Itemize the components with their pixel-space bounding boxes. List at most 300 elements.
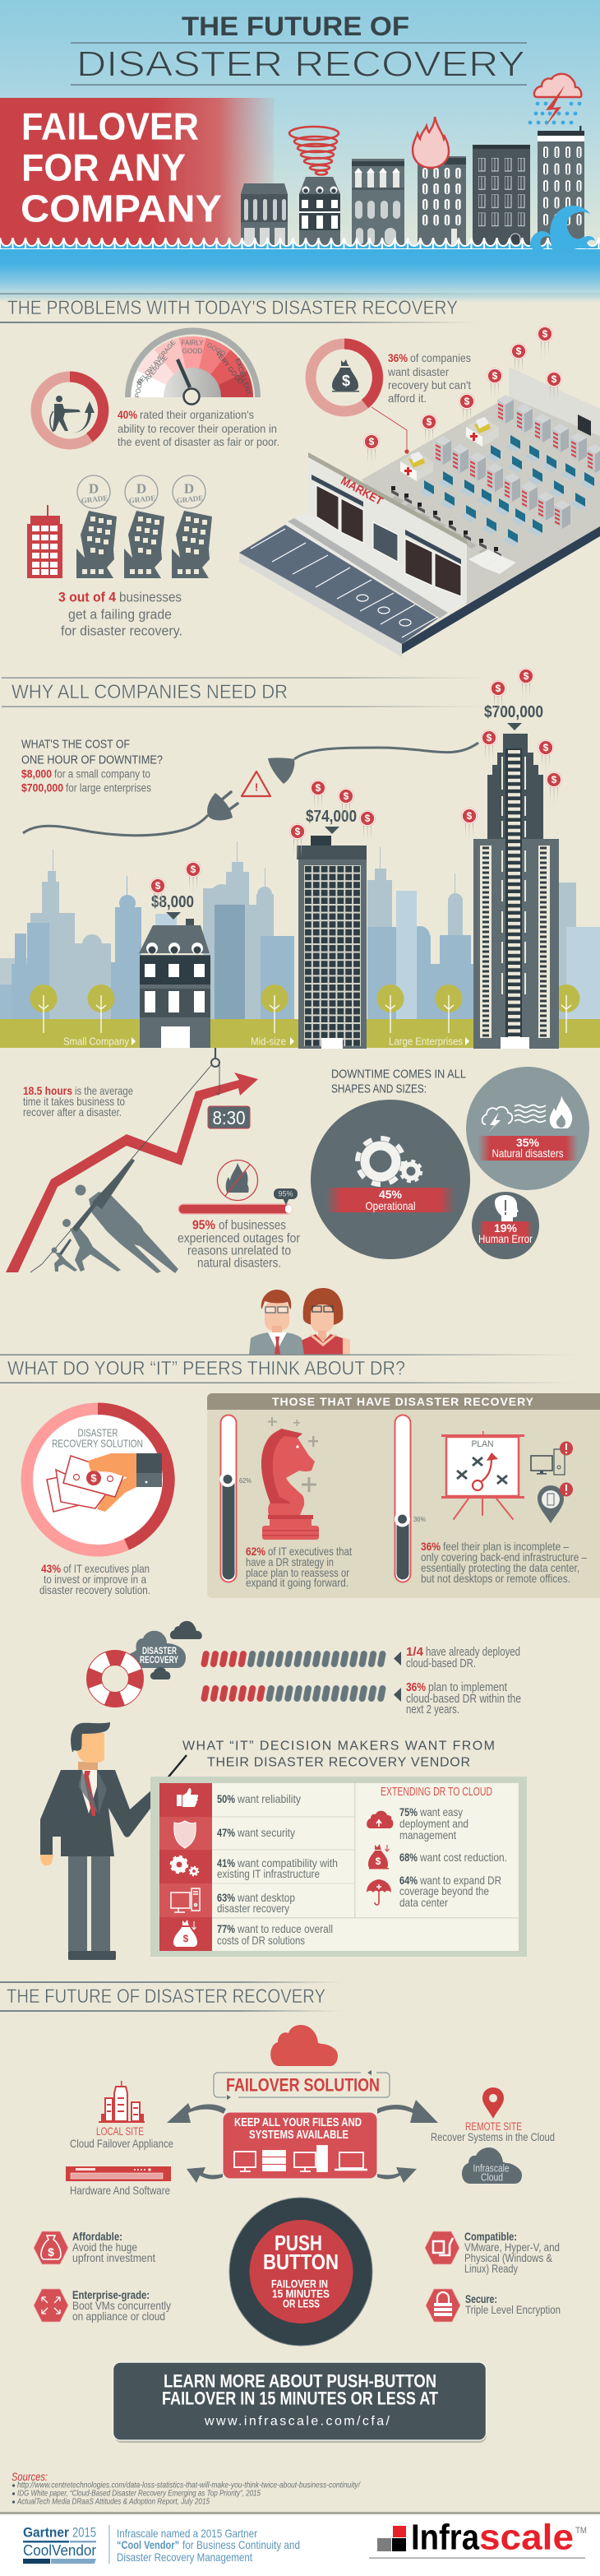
icon: cloud upload bbox=[367, 1811, 393, 1828]
list: vendor wants: 47% bbox=[217, 1826, 235, 1839]
value: $74,000: $74,000 bbox=[306, 808, 357, 826]
value: $700,000 bbox=[484, 703, 543, 730]
heading: WHAT DO YOUR “IT” PEERS THINK ABOUT DR? bbox=[7, 1357, 405, 1380]
icon: desktop alert bbox=[531, 1441, 573, 1475]
text block: 1/4: cloud-based DR. bbox=[406, 1657, 476, 1670]
text block: 40%: ability to recover their operation in bbox=[118, 422, 277, 435]
text block: 75%: deployment and bbox=[399, 1817, 468, 1830]
dollar pins: $ bbox=[365, 813, 371, 824]
icon: puzzle arrows bbox=[433, 2238, 453, 2255]
progress bar: 95% bbox=[178, 1188, 298, 1214]
text block: 3 out of 4: 3 out of 4 bbox=[58, 589, 116, 605]
icon: money bag bbox=[41, 2235, 61, 2259]
panel: keep all your files bbox=[223, 2112, 377, 2179]
icon: thumbs up bbox=[177, 1788, 198, 1807]
hook and rope bbox=[30, 1048, 219, 1272]
bubble: operational: Operational bbox=[365, 1199, 416, 1212]
icon: warning triangle: ! bbox=[255, 781, 258, 793]
bubble: human error bbox=[472, 1192, 539, 1259]
heading: downtime bbox=[331, 1068, 466, 1096]
dollar pins: $ bbox=[516, 345, 522, 357]
text block: cost of downtime: ONE HOUR OF DOWNTIME? bbox=[21, 753, 163, 767]
text block: 18.5 hours bbox=[23, 1084, 133, 1119]
building 4 bbox=[418, 156, 466, 245]
icon: money bag down: $ bbox=[376, 1856, 381, 1867]
donut chart: 43% bbox=[21, 1402, 175, 1556]
list: vendor wants: want compatibility with bbox=[237, 1856, 338, 1869]
dollar pins: $ bbox=[295, 826, 301, 837]
text block: 36%: afford it. bbox=[388, 391, 427, 405]
ground labels: Mid-size bbox=[251, 1035, 286, 1048]
icon: shield bbox=[174, 1821, 196, 1848]
dollar pins: $ bbox=[487, 732, 492, 744]
Gartner cool vendor logo: 2015 bbox=[72, 2525, 96, 2540]
text block: 40% bbox=[118, 408, 279, 448]
remote site bbox=[431, 2087, 555, 2184]
text block: cost of downtime: $700,000 bbox=[21, 781, 63, 795]
icon: hardware appliance bbox=[66, 2166, 171, 2181]
icon: warning triangle bbox=[242, 771, 270, 796]
isometric store bbox=[239, 326, 600, 657]
icon: location alert bbox=[538, 1482, 573, 1523]
text block: 62% bbox=[246, 1545, 352, 1589]
text block: 36% cloud: plan to implement bbox=[428, 1681, 507, 1694]
bubble: natural disasters: Natural disasters bbox=[492, 1147, 564, 1160]
building 5 bbox=[473, 145, 530, 245]
dollar pins: $ bbox=[191, 864, 196, 875]
icon: city bbox=[99, 2081, 145, 2123]
local site: Cloud Failover Appliance bbox=[70, 2137, 173, 2150]
red banner: FAILOVER bbox=[21, 105, 199, 148]
text block: 18.5 hours: time it takes business to bbox=[23, 1095, 125, 1108]
icon: unplugged cable bbox=[23, 743, 478, 836]
callout: 95% bbox=[274, 1188, 298, 1205]
text block: 3 out of 4: for disaster recovery. bbox=[61, 623, 182, 638]
text block: 36% cloud: 36% bbox=[406, 1681, 426, 1694]
water bbox=[0, 238, 600, 303]
disaster recovery cloud: RECOVERY bbox=[140, 1654, 178, 1666]
text block: Gartner note: Disaster Recovery Management bbox=[117, 2551, 252, 2564]
list: vendor wants: want desktop bbox=[237, 1891, 295, 1904]
text block: 95%: reasons unrelated to bbox=[187, 1244, 291, 1258]
mid-size building bbox=[297, 808, 367, 1049]
panel: vendor wants bbox=[150, 1777, 527, 1957]
pill chart: 1/4 bbox=[201, 1651, 401, 1667]
callout line bbox=[372, 407, 409, 454]
dollar pins bbox=[363, 326, 562, 472]
text block: cost of downtime: WHAT'S THE COST OF bbox=[21, 737, 130, 752]
text block: cost of downtime: for a small company to bbox=[54, 768, 150, 780]
callout: 95%: 95% bbox=[278, 1189, 293, 1198]
pill chart: 36% bbox=[201, 1685, 401, 1702]
failing grade buildings bbox=[27, 475, 212, 578]
list: vendor wants: 41% bbox=[217, 1856, 235, 1869]
panel: those that have disaster recovery: THOSE THAT HAVE DISASTER RECOVERY bbox=[272, 1395, 534, 1408]
heading: what IT decision makers want: WHAT “IT” DECISION MAKERS WANT FROM bbox=[182, 1739, 495, 1754]
icon: grade D building 1: GRADE bbox=[81, 493, 108, 505]
text block: 40%: 40% bbox=[118, 408, 137, 421]
sources: Sources: bbox=[12, 2470, 48, 2483]
heading: THE FUTURE OF DISASTER RECOVERY bbox=[7, 1985, 325, 2008]
city skyline bbox=[0, 841, 600, 1020]
sources: http://www.centretechnologies.com/data-loss-statistics-that-will-make-you-think-twice-about-business-continuity/ bbox=[17, 2481, 361, 2490]
first aid boxes bbox=[400, 417, 499, 481]
benefit: affordable: Avoid the huge bbox=[72, 2240, 137, 2254]
push button: OR LESS bbox=[283, 2298, 320, 2310]
icon: expand arrows bbox=[42, 2297, 60, 2314]
benefit: affordable: Affordable: bbox=[72, 2230, 122, 2243]
text block: 62%: expand it going forward. bbox=[246, 1576, 348, 1589]
icon: head with exclamation bbox=[495, 1195, 519, 1221]
dollar pins: $ bbox=[467, 810, 473, 822]
icon: infrascale cloud bbox=[462, 2147, 522, 2184]
donut chart: 36% bbox=[311, 344, 378, 411]
icon: plan board bbox=[441, 1431, 524, 1519]
slider: 36% bbox=[395, 1415, 426, 1582]
text block: cost of downtime bbox=[21, 737, 163, 795]
panel: keep all your files: KEEP ALL YOUR FILES AND bbox=[234, 2116, 362, 2129]
icon: money bag bbox=[173, 1920, 197, 1947]
push button bbox=[229, 2198, 372, 2346]
text block: 64%: 64% bbox=[399, 1874, 418, 1887]
small dark cloud bbox=[170, 1621, 202, 1639]
donut chart: 40% bbox=[36, 377, 104, 444]
icon: grade D building 2: D bbox=[136, 480, 146, 497]
icon: hand with money bbox=[47, 1453, 162, 1512]
text block: 43%: 43% bbox=[41, 1562, 61, 1575]
text block: 36% cloud: cloud-based DR within the bbox=[406, 1693, 521, 1706]
value: $74,000 bbox=[306, 808, 357, 834]
benefit: secure: Secure: bbox=[465, 2292, 497, 2305]
list: vendor wants: want to reduce overall bbox=[237, 1922, 333, 1935]
dollar pins: $ bbox=[316, 782, 321, 794]
gauge chart: VERY GOOD bbox=[215, 350, 245, 386]
bubble: operational: 45% bbox=[379, 1188, 403, 1201]
panel: keep all your files: SYSTEMS AVAILABLE bbox=[249, 2129, 348, 2142]
list: vendor wants: want security bbox=[237, 1826, 295, 1839]
panel: those that have disaster recovery bbox=[207, 1393, 600, 1598]
icon: plan board: PLAN bbox=[472, 1439, 494, 1449]
failover solution box: FAILOVER SOLUTION bbox=[226, 2074, 380, 2096]
section: what do your IT peers think bbox=[0, 1354, 600, 1960]
title: THE FUTURE OF bbox=[182, 12, 409, 41]
benefit: affordable: upfront investment bbox=[72, 2251, 155, 2264]
icon: red building bbox=[27, 505, 62, 578]
icon: hand with money: $ bbox=[90, 1472, 97, 1484]
text block: 64% bbox=[399, 1874, 501, 1909]
large enterprise building bbox=[473, 703, 559, 1049]
section: the problems bbox=[0, 293, 600, 657]
icons: devices bbox=[234, 2146, 367, 2171]
dollar pins: $ bbox=[543, 742, 549, 753]
text block: 36%: 36% bbox=[421, 1540, 441, 1553]
Gartner cool vendor logo: Gartner bbox=[23, 2525, 69, 2540]
clock: 8:30 bbox=[212, 1107, 245, 1128]
remote site: Recover Systems in the Cloud bbox=[431, 2130, 555, 2143]
call to action: LEARN MORE ABOUT PUSH-BUTTON bbox=[164, 2370, 436, 2392]
lifebuoy bbox=[94, 1658, 136, 1699]
icon: grade D building 3: GRADE bbox=[176, 493, 204, 505]
text block: 36% bbox=[421, 1540, 587, 1585]
needle bbox=[176, 359, 199, 405]
dollar pins: $ bbox=[155, 880, 161, 892]
dollar pins: $ bbox=[369, 436, 375, 447]
dollar pins: $ bbox=[492, 370, 498, 382]
disaster recovery cloud: DISASTER bbox=[142, 1645, 177, 1656]
bubble: natural disasters bbox=[466, 1067, 589, 1190]
benefit: secure bbox=[426, 2289, 561, 2322]
text block: 75% bbox=[399, 1805, 468, 1842]
list: vendor wants: 77% bbox=[217, 1922, 235, 1935]
icon: money bag down bbox=[368, 1844, 390, 1869]
bubble: operational bbox=[311, 1100, 470, 1259]
dollar pins bbox=[150, 668, 562, 916]
footer bbox=[0, 2512, 600, 2576]
gauge chart: EXCELLENT bbox=[234, 357, 253, 396]
icon: storm, water and fire bbox=[482, 1096, 572, 1133]
gauge chart: AVERAGE bbox=[143, 354, 169, 382]
dollar pins: $ bbox=[496, 683, 501, 694]
local site: Hardware And Software bbox=[70, 2184, 170, 2197]
Infrascale logo: scale bbox=[479, 2517, 574, 2558]
text block: 95% bbox=[178, 1219, 301, 1270]
heading: downtime: DOWNTIME COMES IN ALL bbox=[331, 1068, 466, 1081]
text block: 43% bbox=[39, 1562, 150, 1596]
text block: 95%: 95% bbox=[192, 1219, 215, 1232]
call to action: www.infrascale.com/cfa/ bbox=[204, 2415, 390, 2428]
sources bbox=[12, 2470, 361, 2507]
title: DISASTER RECOVERY bbox=[76, 44, 525, 84]
section: recovery and outages bbox=[6, 1048, 589, 1355]
text block: 75%: 75% bbox=[399, 1805, 418, 1818]
push button: BUTTON bbox=[263, 2249, 339, 2274]
text block: 36% cloud bbox=[406, 1681, 521, 1717]
icon: gears bbox=[358, 1138, 421, 1184]
icon: red cloud bbox=[270, 2025, 338, 2066]
remote site: REMOTE SITE bbox=[465, 2120, 522, 2133]
call to action: FAILOVER IN 15 MINUTES OR LESS AT bbox=[162, 2388, 438, 2408]
failover solution box bbox=[214, 2070, 390, 2100]
local site bbox=[66, 2081, 173, 2197]
heading: WHY ALL COMPANIES NEED DR bbox=[12, 681, 288, 703]
text block: 1/4 bbox=[406, 1646, 520, 1670]
text block: Gartner note bbox=[117, 2527, 300, 2564]
heading: what IT decision makers want bbox=[182, 1739, 495, 1770]
text block: 64%: want to expand DR bbox=[419, 1874, 501, 1887]
dollar pins: $ bbox=[427, 416, 432, 428]
icon: money bag: $ bbox=[342, 373, 350, 389]
text block: 75%: want easy bbox=[419, 1805, 463, 1818]
Gartner cool vendor logo bbox=[23, 2525, 96, 2564]
slider: 62%: 62% bbox=[239, 1476, 252, 1485]
value: $8,000: $8,000 bbox=[151, 893, 194, 911]
benefit: compatible: VMware, Hyper-V, and bbox=[464, 2240, 560, 2254]
text block: 18.5 hours: recover after a disaster. bbox=[23, 1105, 122, 1119]
benefit: enterprise-grade: on appliance or cloud bbox=[72, 2310, 165, 2323]
text block: 36%: feel their plan is incomplete – bbox=[443, 1540, 569, 1553]
text block: 36%: but not desktops or remote offices. bbox=[421, 1572, 570, 1585]
list: vendor wants: 50% bbox=[217, 1792, 235, 1805]
icon: padlock bbox=[434, 2292, 452, 2316]
text block: 36%: recovery but can't bbox=[388, 378, 471, 391]
Infrascale logo bbox=[369, 2517, 587, 2559]
push button: FAILOVER IN bbox=[271, 2278, 328, 2290]
icon: money bag: $ bbox=[183, 1933, 189, 1944]
text block: 36%: of companies bbox=[410, 351, 471, 364]
icon: grade D building 3: D bbox=[184, 480, 194, 497]
text block: 43%: of IT executives plan bbox=[63, 1562, 150, 1575]
checkouts bbox=[390, 486, 516, 574]
heading: THE PROBLEMS WITH TODAY'S DISASTER RECOVERY bbox=[7, 297, 458, 319]
sources: IDG White paper, “Cloud-Based Disaster Recovery Emerging as Top Priority”, 2015 bbox=[17, 2489, 261, 2499]
dollar pins: $ bbox=[552, 774, 557, 785]
text block: cost of downtime: for large enterprises bbox=[66, 781, 151, 795]
local site: LOCAL SITE bbox=[96, 2124, 144, 2138]
text block: 36%: want disaster bbox=[387, 365, 449, 378]
servers bbox=[435, 395, 600, 529]
gauge chart: GOOD bbox=[205, 341, 227, 358]
text block: 3 out of 4: businesses bbox=[119, 589, 182, 605]
slider: 62% bbox=[220, 1415, 252, 1582]
ground bbox=[0, 1019, 600, 1048]
tiny dark cloud bbox=[150, 1667, 170, 1679]
shop front: MARKET bbox=[339, 474, 385, 507]
text block: 36% bbox=[387, 351, 471, 405]
Infrascale logo: TM bbox=[575, 2526, 587, 2536]
subheading: extending DR to cloud: EXTENDING DR TO CLOUD bbox=[381, 1786, 492, 1799]
bubble: natural disasters: 35% bbox=[516, 1136, 540, 1149]
icon: fire bbox=[413, 117, 449, 168]
value: $700,000: $700,000 bbox=[484, 703, 543, 721]
text block: 75%: management bbox=[399, 1828, 456, 1842]
text block: Gartner note: “Cool Vendor” bbox=[117, 2538, 179, 2551]
section: the future of disaster recovery bbox=[0, 1981, 561, 2507]
arrow chart bbox=[6, 1073, 258, 1272]
text block: 95%: of businesses bbox=[219, 1219, 286, 1232]
text block: 62%: of IT executives that bbox=[268, 1545, 352, 1558]
text block: 40%: the event of disaster as fair or poor. bbox=[118, 435, 279, 448]
small company building bbox=[139, 893, 210, 1048]
benefit: compatible bbox=[425, 2230, 560, 2275]
icon: grade D building 1: D bbox=[89, 480, 99, 497]
section: why all companies need DR bbox=[0, 668, 600, 1049]
gauge chart: BELOW AVERAGE bbox=[135, 339, 178, 387]
building 3 bbox=[352, 159, 404, 245]
gauge chart bbox=[125, 327, 261, 405]
benefit: enterprise-grade: Enterprise-grade: bbox=[72, 2288, 150, 2301]
list: vendor wants: existing IT infrastructure bbox=[217, 1867, 320, 1880]
laptops bbox=[419, 435, 594, 546]
sources: ActualTech Media DRaaS Attitudes & Adoption Report, July 2015 bbox=[16, 2497, 210, 2507]
icon: tornado bbox=[289, 127, 339, 174]
icon: umbrella bbox=[367, 1879, 391, 1905]
building 2 bbox=[299, 177, 340, 245]
header panel bbox=[0, 0, 600, 303]
list: vendor wants: costs of DR solutions bbox=[217, 1934, 305, 1947]
text block: cost of downtime: $8,000 bbox=[21, 768, 52, 780]
heading: what IT decision makers want: THEIR DISASTER RECOVERY VENDOR bbox=[207, 1755, 470, 1770]
benefit: enterprise-grade: Boot VMs concurrently bbox=[72, 2299, 171, 2312]
building 6 bbox=[538, 126, 585, 245]
text block: 95%: natural disasters. bbox=[197, 1257, 281, 1270]
title bbox=[71, 12, 527, 86]
benefit: affordable bbox=[34, 2230, 155, 2264]
red banner: FOR ANY bbox=[21, 146, 186, 189]
list: vendor wants: want reliability bbox=[237, 1792, 301, 1805]
trees bbox=[30, 985, 580, 1033]
arrows bbox=[167, 2100, 438, 2183]
icon: storm cloud bbox=[528, 74, 581, 126]
text block: 64%: data center bbox=[399, 1896, 448, 1909]
icon: chess knight bbox=[261, 1417, 319, 1540]
text block: 95%: experienced outages for bbox=[178, 1232, 301, 1245]
benefit: compatible: Compatible: bbox=[464, 2230, 517, 2243]
heading: downtime: SHAPES AND SIZES: bbox=[331, 1082, 427, 1096]
benefit: secure: Triple Level Encryption bbox=[465, 2303, 561, 2316]
icon: grade D building 1 bbox=[76, 475, 117, 578]
dollar pins: $ bbox=[542, 328, 548, 340]
text block: 18.5 hours: is the average bbox=[75, 1084, 133, 1097]
text block: 3 out of 4: get a failing grade bbox=[68, 607, 172, 622]
back wall bbox=[509, 367, 600, 436]
push button: PUSH bbox=[275, 2231, 322, 2255]
push button: 15 MINUTES bbox=[272, 2288, 330, 2300]
text block: 40%: rated their organization's bbox=[140, 408, 254, 421]
disaster recovery cloud bbox=[127, 1631, 186, 1668]
text block: 68%: want cost reduction. bbox=[419, 1851, 507, 1864]
text block: 1/4: have already deployed bbox=[426, 1646, 520, 1659]
text block: 18.5 hours: 18.5 hours bbox=[23, 1084, 72, 1097]
text block: Gartner note: for Business Continuity and bbox=[182, 2538, 300, 2551]
icon: big wave bbox=[530, 206, 595, 251]
icon: location pin bbox=[482, 2087, 504, 2119]
text block: Gartner note: Infrascale named a 2015 Gartner bbox=[117, 2527, 257, 2540]
icon: clouds and lifebuoy bbox=[94, 1621, 202, 1699]
icon: infrascale cloud: Infrascale bbox=[473, 2161, 510, 2175]
building 1 bbox=[241, 183, 288, 245]
man bbox=[249, 1290, 304, 1355]
icon: grade D building 2: GRADE bbox=[128, 493, 156, 505]
icon: person pulling arrow bbox=[50, 396, 95, 433]
benefit: compatible: Linux) Ready bbox=[464, 2262, 518, 2275]
list: vendor wants bbox=[217, 1792, 338, 1947]
benefit: compatible: Physical (Windows & bbox=[464, 2251, 553, 2264]
text block: 43%: disaster recovery solution. bbox=[39, 1583, 150, 1596]
ground labels bbox=[63, 1035, 469, 1048]
donut chart: 43%: RECOVERY SOLUTION bbox=[52, 1438, 143, 1449]
icon: money bag: $ bbox=[48, 2245, 54, 2259]
floor bbox=[362, 396, 600, 605]
icon: grade D building 3 bbox=[172, 475, 212, 578]
dollar pins: $ bbox=[464, 396, 470, 407]
dollar pins: $ bbox=[344, 790, 349, 802]
text block: 62%: 62% bbox=[246, 1545, 265, 1558]
figures pulling rope bbox=[51, 1159, 178, 1273]
red banner: COMPANY bbox=[21, 188, 222, 230]
donut chart: 43%: DISASTER bbox=[77, 1426, 118, 1439]
icon: gears bbox=[171, 1856, 199, 1875]
icon: desktop bbox=[171, 1888, 200, 1912]
value: $8,000 bbox=[151, 893, 194, 920]
shop front bbox=[308, 452, 467, 602]
bubble: human error: 19% bbox=[494, 1221, 518, 1235]
bubble: human error: Human Error bbox=[478, 1232, 533, 1245]
call to action bbox=[113, 2362, 487, 2443]
text block: 62%: have a DR strategy in bbox=[246, 1555, 334, 1568]
gauge chart: POOR bbox=[133, 378, 145, 398]
text block: 62%: place plan to reassess or bbox=[246, 1566, 349, 1579]
woman bbox=[300, 1288, 350, 1355]
